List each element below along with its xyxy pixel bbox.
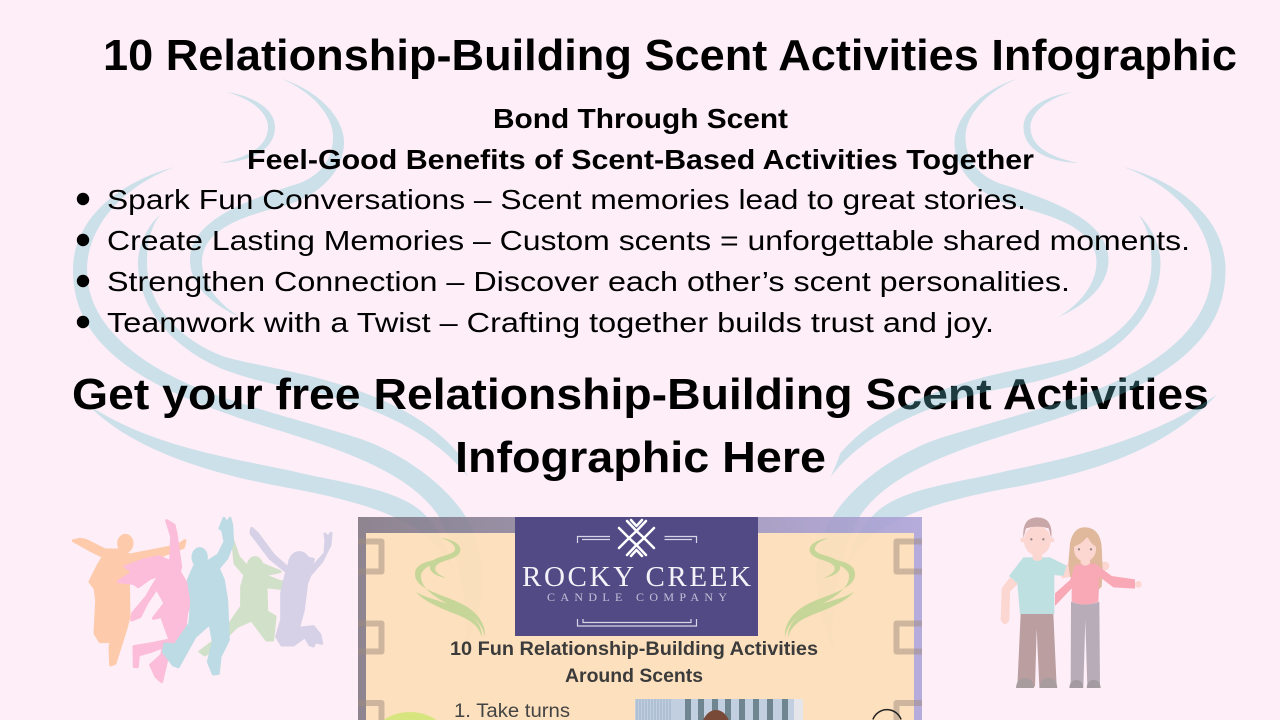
subheading: Bond Through Scent	[493, 103, 788, 134]
blue jumper	[163, 518, 233, 674]
card heading	[450, 638, 818, 687]
pink jumper	[118, 521, 192, 682]
right scent swirl	[816, 79, 1226, 650]
icon: couple standing together	[1001, 517, 1142, 688]
panel: infographic preview card	[358, 517, 922, 720]
subheading	[247, 103, 1034, 175]
card background	[366, 533, 914, 720]
bullet: strengthen connection: Strengthen Connection – Discover each other’s scent personalities.	[107, 266, 1070, 297]
orange jumper	[73, 535, 185, 665]
main title: 10 Relationship-Building Scent Activities Infographic	[103, 31, 1237, 80]
logo: Rocky Creek Candle Company	[515, 517, 758, 636]
benefits list	[77, 184, 1190, 338]
call to action heading: Get your free Relationship-Building Scent Activities	[72, 370, 1209, 419]
logo: Rocky Creek Candle Company: ROCKY CREEK	[522, 561, 751, 593]
card frame	[358, 517, 922, 720]
icon: outlined circle	[873, 710, 901, 720]
bullet: teamwork with a twist: Teamwork with a Twist – Crafting together builds trust and joy.	[107, 307, 994, 338]
icon: jumping people silhouettes	[73, 518, 331, 682]
woman	[1055, 527, 1142, 688]
icon: green swirl left	[415, 538, 485, 637]
card heading: Around Scents	[565, 665, 703, 687]
icon: green circle	[384, 712, 436, 720]
green jumper	[200, 540, 296, 655]
logo brackets	[578, 536, 696, 626]
subheading: Feel-Good Benefits of Scent-Based Activities Together	[247, 144, 1034, 175]
logo: Rocky Creek Candle Company: CANDLE COMPANY	[547, 590, 727, 604]
card heading: 10 Fun Relationship-Building Activities	[450, 638, 818, 660]
lilac jumper	[251, 528, 331, 646]
frame knots	[358, 542, 922, 720]
man	[1001, 517, 1109, 688]
icon: green swirl right	[785, 538, 855, 637]
photo: person in front of building	[635, 699, 803, 720]
left scent swirl	[73, 79, 482, 650]
bullet: spark fun conversations: Spark Fun Conversations – Scent memories lead to great stories.	[107, 184, 1026, 215]
bullet: create lasting memories: Create Lasting Memories – Custom scents = unforgettable shared moments.	[107, 225, 1190, 256]
icon: snowflake emblem	[619, 520, 654, 556]
call to action heading	[72, 370, 1209, 482]
call to action heading: Infographic Here	[455, 433, 826, 482]
